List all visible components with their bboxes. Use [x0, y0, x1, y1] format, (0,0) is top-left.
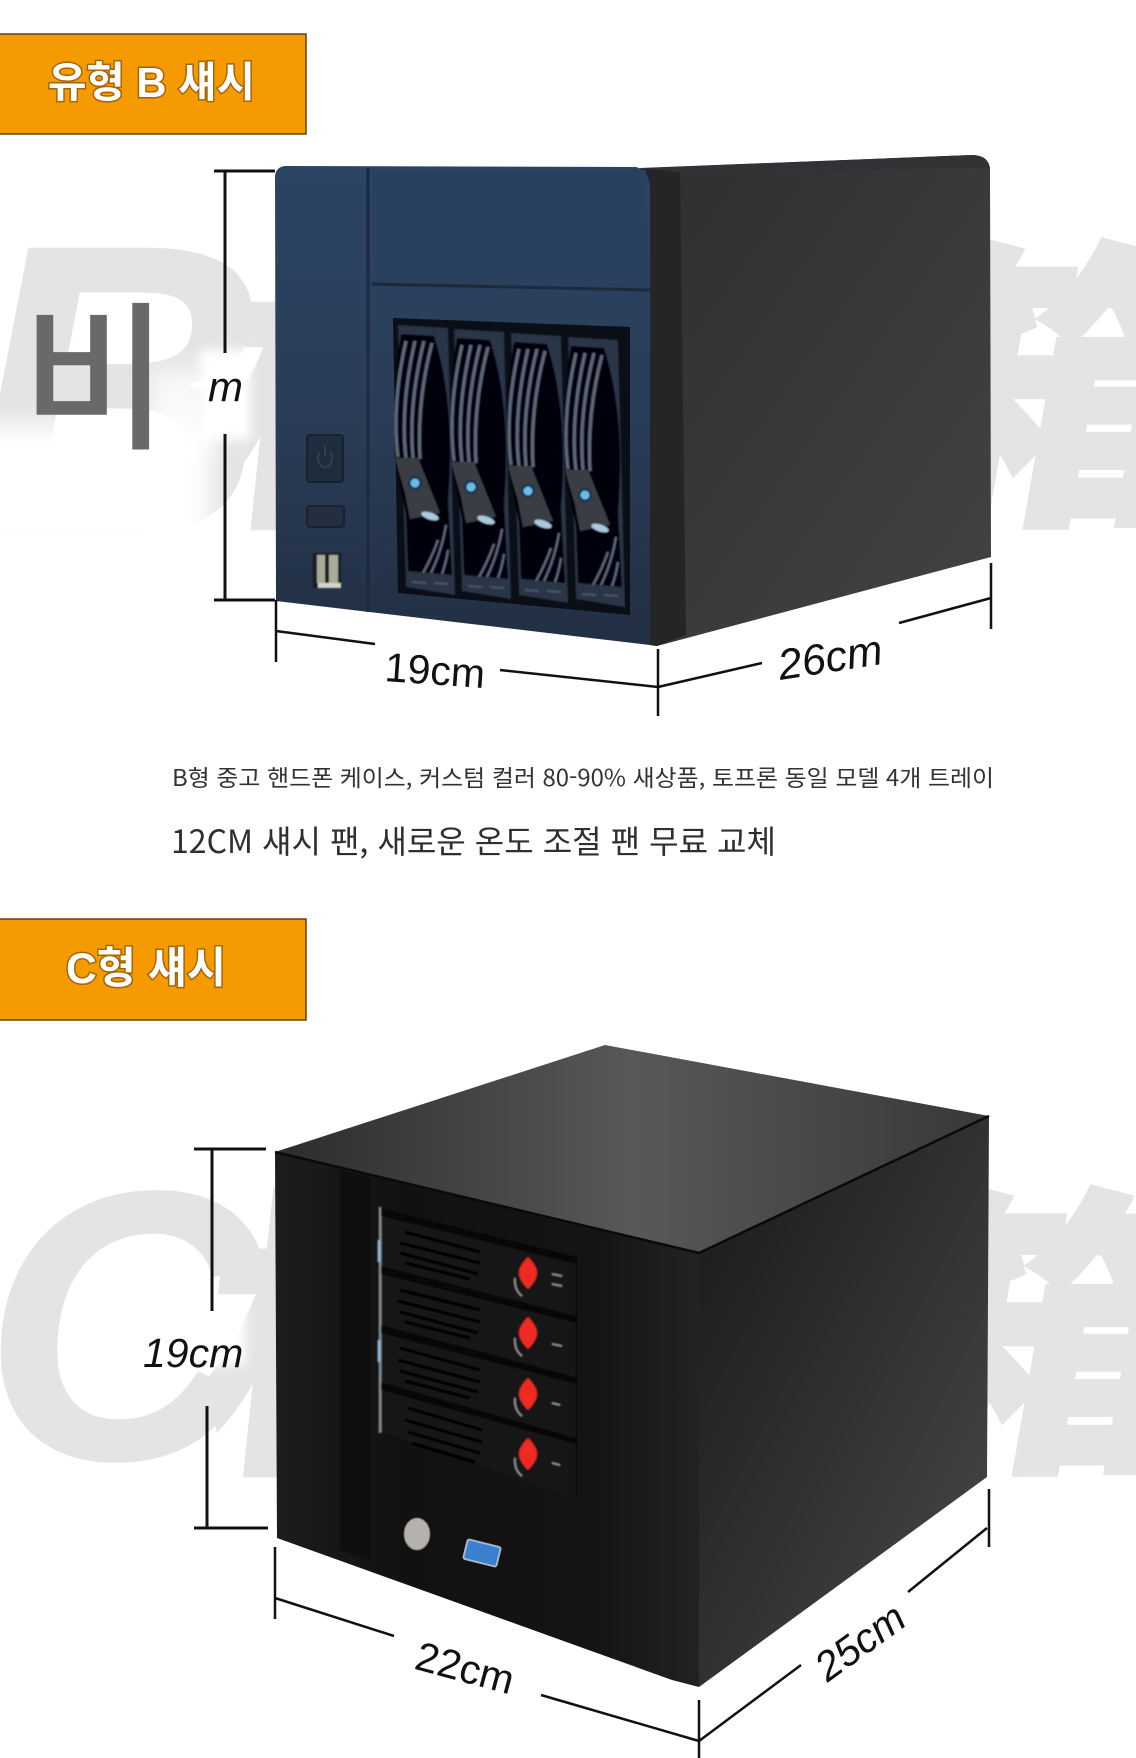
height dimension: 19cm type C: 19cm — [143, 1330, 243, 1376]
height dimension: 19cm type C — [143, 1149, 268, 1528]
front face — [275, 1152, 699, 1687]
usb port — [463, 1539, 501, 1567]
chassis: type B product photo — [275, 155, 991, 646]
top face — [275, 1045, 989, 1253]
side edge band — [640, 168, 686, 646]
watermark: C chassis background lettering — [0, 1102, 1136, 1541]
power button — [307, 435, 343, 482]
silver left rail — [378, 1207, 382, 1433]
drive trays — [379, 1207, 576, 1498]
watermark: C chassis background lettering: 机 — [186, 1103, 527, 1531]
side face — [699, 1116, 989, 1687]
side panel — [646, 155, 991, 646]
caption: fan note: 12CM 섀시 팬, 새로운 온도 조절 팬 무료 교체 — [171, 817, 776, 863]
overlay label: 비: 비 — [21, 251, 169, 483]
height dimension: type B — [208, 171, 275, 600]
usb ports — [313, 553, 341, 588]
drive trays — [394, 325, 625, 607]
caption: type B description: B형 중고 핸드폰 케이스, 커스텀 컬러 80-90% 새상품, 토프론 동일 모델 4개 트레이 — [172, 759, 994, 793]
watermark: B chassis background lettering: 机 — [194, 156, 535, 584]
drive cage — [377, 1207, 577, 1497]
banner: type C chassis: C형 섀시 — [66, 945, 226, 993]
reset button — [307, 506, 344, 527]
drive bay — [393, 318, 630, 615]
red latch handles — [519, 1257, 537, 1470]
front panel — [275, 166, 650, 645]
dimension: 26cm depth type B: 26cm — [773, 626, 886, 690]
dimension: 19cm width type B: 19cm — [383, 644, 487, 697]
dimension: 26cm depth type B — [658, 563, 991, 716]
power button — [404, 1518, 430, 1550]
banner: type B chassis — [0, 34, 306, 134]
dimension: 25cm depth type C: 25cm — [805, 1594, 914, 1691]
dimension: 22cm width type C — [275, 1547, 699, 1741]
indicator marks — [552, 1274, 562, 1465]
watermark: B chassis background lettering — [0, 155, 1136, 625]
banner: type B chassis: 유형 B 섀시 — [48, 59, 255, 106]
chassis: type C product photo — [275, 1045, 989, 1687]
height dimension: type B: m — [208, 363, 243, 410]
dimension: 19cm width type B — [276, 600, 658, 697]
dimension: 22cm width type C: 22cm — [411, 1633, 519, 1703]
silver latch arcs — [515, 1278, 522, 1476]
banner: type C chassis — [0, 919, 306, 1020]
dimension: 25cm depth type C — [699, 1489, 989, 1758]
dark edges — [275, 1116, 989, 1253]
tray vents — [398, 1232, 482, 1462]
